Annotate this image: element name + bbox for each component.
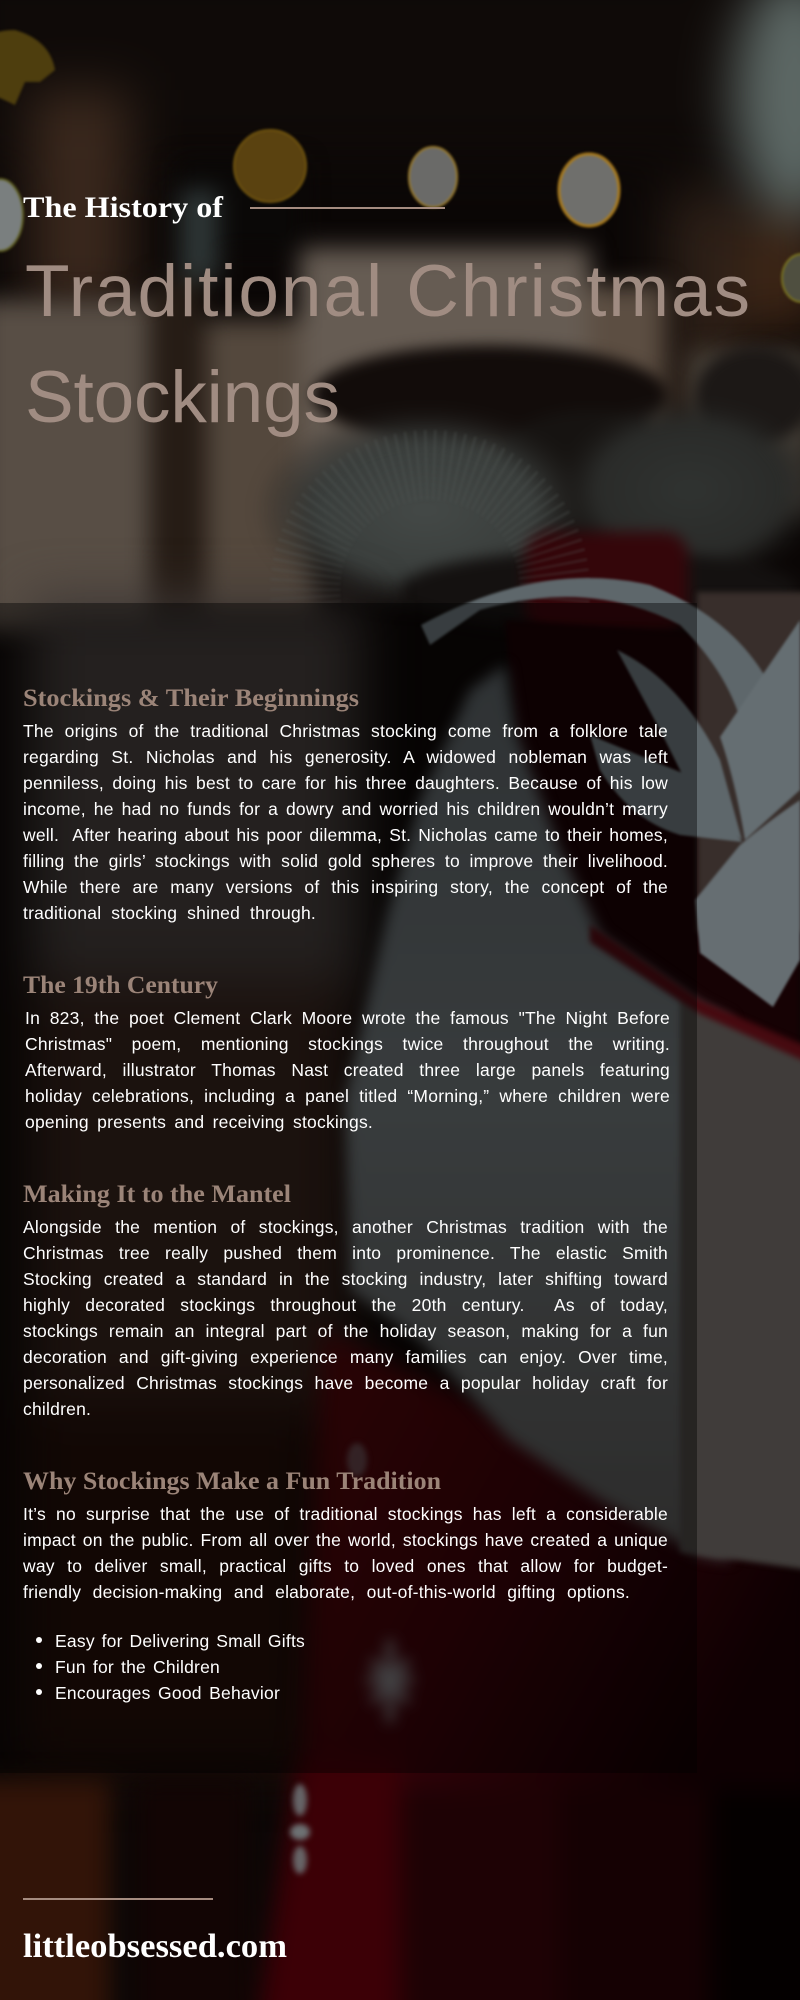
text block: beginnings: income, he had no funds for a dowry and worried his children wouldn’t marry — [23, 799, 668, 819]
text block: mantel: personalized Christmas stockings have become a popular holiday craft for — [23, 1373, 668, 1393]
snowflake decorations — [366, 1640, 414, 1722]
text block: mantel: decoration and gift-giving experience many families can enjoy. Over time, — [23, 1347, 668, 1367]
text block: mantel: Christmas tree really pushed them into prominence. The elastic Smith — [23, 1243, 668, 1263]
text block: beginnings — [23, 721, 668, 923]
heading: Why Stockings Make a Fun Tradition: Why Stockings Make a Fun Tradition — [23, 1468, 441, 1495]
title: Traditional Christmas Stockings: Traditional Christmas — [25, 251, 750, 332]
text block: 19th century: Afterward, illustrator Thomas Nast created three large panels featuring — [25, 1060, 670, 1080]
title: Traditional Christmas Stockings — [25, 251, 750, 438]
text block: beginnings: well. After hearing about his poor dilemma, St. Nicholas came to their homes, — [23, 825, 668, 845]
text block: mantel: highly decorated stockings throughout the 20th century. As of today, — [23, 1295, 668, 1315]
bullet list: Encourages Good Behavior — [55, 1683, 280, 1703]
text block: fun tradition: impact on the public. From all over the world, stockings have created a unique — [23, 1530, 668, 1550]
heading: Stockings & Their Beginnings: Stockings & Their Beginnings — [23, 685, 359, 712]
bullet list: Fun for the Children — [55, 1657, 220, 1677]
bow ribbons — [421, 578, 800, 1007]
text block: beginnings: The origins of the traditional Christmas stocking come from a folklore tale — [23, 721, 668, 741]
text block: fun tradition: It’s no surprise that the use of traditional stockings has left a considerable — [23, 1504, 668, 1524]
stocking cuff — [505, 592, 800, 1050]
text block: beginnings: filling the girls’ stockings with solid gold spheres to improve their livelihood. — [23, 851, 668, 871]
footer rule — [23, 1898, 213, 1900]
lower photo — [20, 600, 360, 1770]
panel: dark article panel — [0, 603, 697, 1773]
text block: mantel: stockings remain an integral part of the holiday season, making for a fun — [23, 1321, 668, 1341]
text block: mantel: Alongside the mention of stockings, another Christmas tradition with the — [23, 1217, 668, 1237]
footer site name: littleobsessed.com — [23, 1928, 287, 1965]
bokeh lights — [0, 30, 800, 302]
text block: fun tradition — [23, 1504, 668, 1602]
text block: mantel: Stocking created a standard in the stocking industry, later shifting toward — [23, 1269, 668, 1289]
text block: beginnings: traditional stocking shined through. — [23, 903, 316, 923]
text block: beginnings: regarding St. Nicholas and his generosity. A widowed nobleman was left — [23, 747, 668, 767]
text block: mantel — [23, 1217, 668, 1419]
text block: mantel: children. — [23, 1399, 91, 1419]
text block: 19th century: In 823, the poet Clement Clark Moore wrote the famous "The Night Before — [25, 1008, 670, 1028]
subtitle: The History of: The History of — [23, 191, 224, 224]
text block: beginnings: While there are many versions of this inspiring story, the concept of the — [23, 877, 668, 897]
text block: 19th century: holiday celebrations, including a panel titled “Morning,” where children were — [25, 1086, 670, 1106]
text block: 19th century: Christmas" poem, mentioning stockings twice throughout the writing. — [25, 1034, 670, 1054]
bullet list — [36, 1631, 305, 1703]
text block: 19th century — [25, 1008, 670, 1132]
bullet list: Easy for Delivering Small Gifts — [55, 1631, 305, 1651]
heading: Making It to the Mantel: Making It to the Mantel — [23, 1181, 291, 1208]
text block: beginnings: penniless, doing his best to care for his three daughters. Because of his low — [23, 773, 668, 793]
subtitle rule — [250, 207, 445, 209]
text block: fun tradition: way to deliver small, practical gifts to loved ones that allow for budget- — [23, 1556, 668, 1576]
wreath — [255, 345, 800, 632]
heading: The 19th Century: The 19th Century — [23, 972, 218, 999]
text block: 19th century: opening presents and receiving stockings. — [25, 1112, 373, 1132]
title: Traditional Christmas Stockings: Stockings — [25, 357, 340, 438]
text block: fun tradition: friendly decision-making and elaborate, out-of-this-world gifting options. — [23, 1582, 630, 1602]
